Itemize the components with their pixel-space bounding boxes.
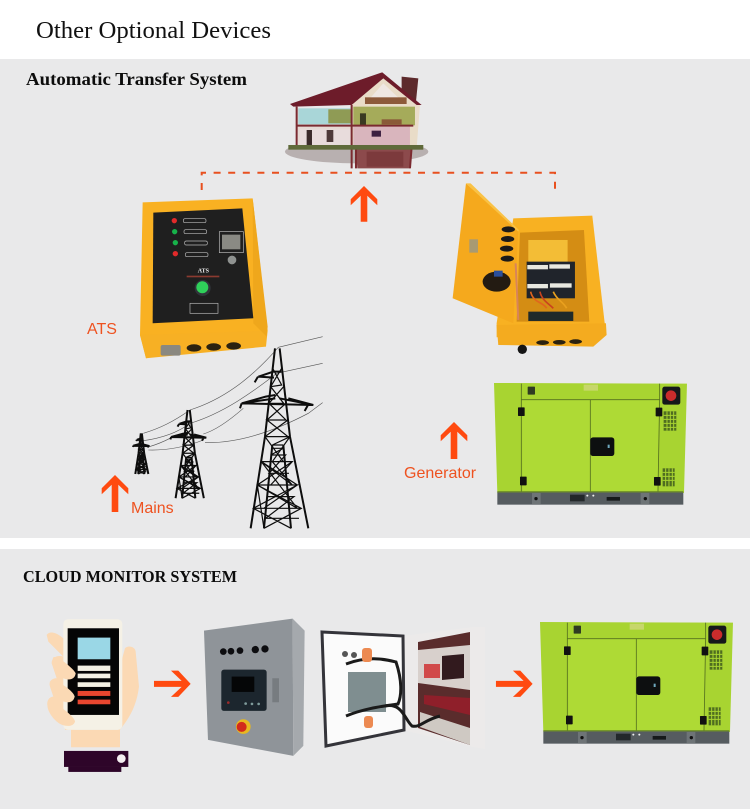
- icon: house cutaway: [285, 72, 428, 168]
- label: Mains: Mains: [131, 500, 174, 517]
- connector: dashed line from ATS to house: [202, 173, 555, 195]
- black control panel: ATS: [198, 268, 210, 274]
- arrow: phone to controller: [154, 671, 191, 697]
- power lines: [143, 337, 323, 450]
- ATS box closed: [140, 198, 268, 358]
- ATS box open: [453, 183, 607, 354]
- label: Generator: Generator: [404, 465, 477, 482]
- tower: medium: [170, 410, 206, 498]
- tower: large: [240, 348, 313, 528]
- controller cabinet closed: [204, 619, 305, 756]
- arrow: generator up: [441, 422, 467, 459]
- heading: cloud monitor system: CLOUD MONITOR SYSTEM: [23, 567, 237, 586]
- heading: automatic transfer system: Automatic Transfer System: [26, 69, 247, 89]
- title: Other Optional Devices: [36, 18, 271, 44]
- arrow: mains up: [102, 475, 128, 512]
- black control panel: [153, 208, 253, 323]
- label: ATS: ATS: [87, 321, 117, 338]
- generator: lower: [540, 622, 733, 744]
- cabinet body: [403, 627, 485, 749]
- panel: cloud monitor system: [0, 549, 750, 809]
- arrow: controller to generator: [496, 671, 533, 697]
- controller cabinet open: [322, 627, 485, 749]
- icon: hand holding phone: [47, 619, 139, 772]
- open door: [322, 632, 404, 746]
- generator: upper: [494, 383, 687, 505]
- tower: small: [133, 433, 149, 474]
- arrow: up to house: [351, 186, 377, 222]
- panel: automatic transfer system: [0, 59, 750, 538]
- power lines and towers: [133, 337, 323, 528]
